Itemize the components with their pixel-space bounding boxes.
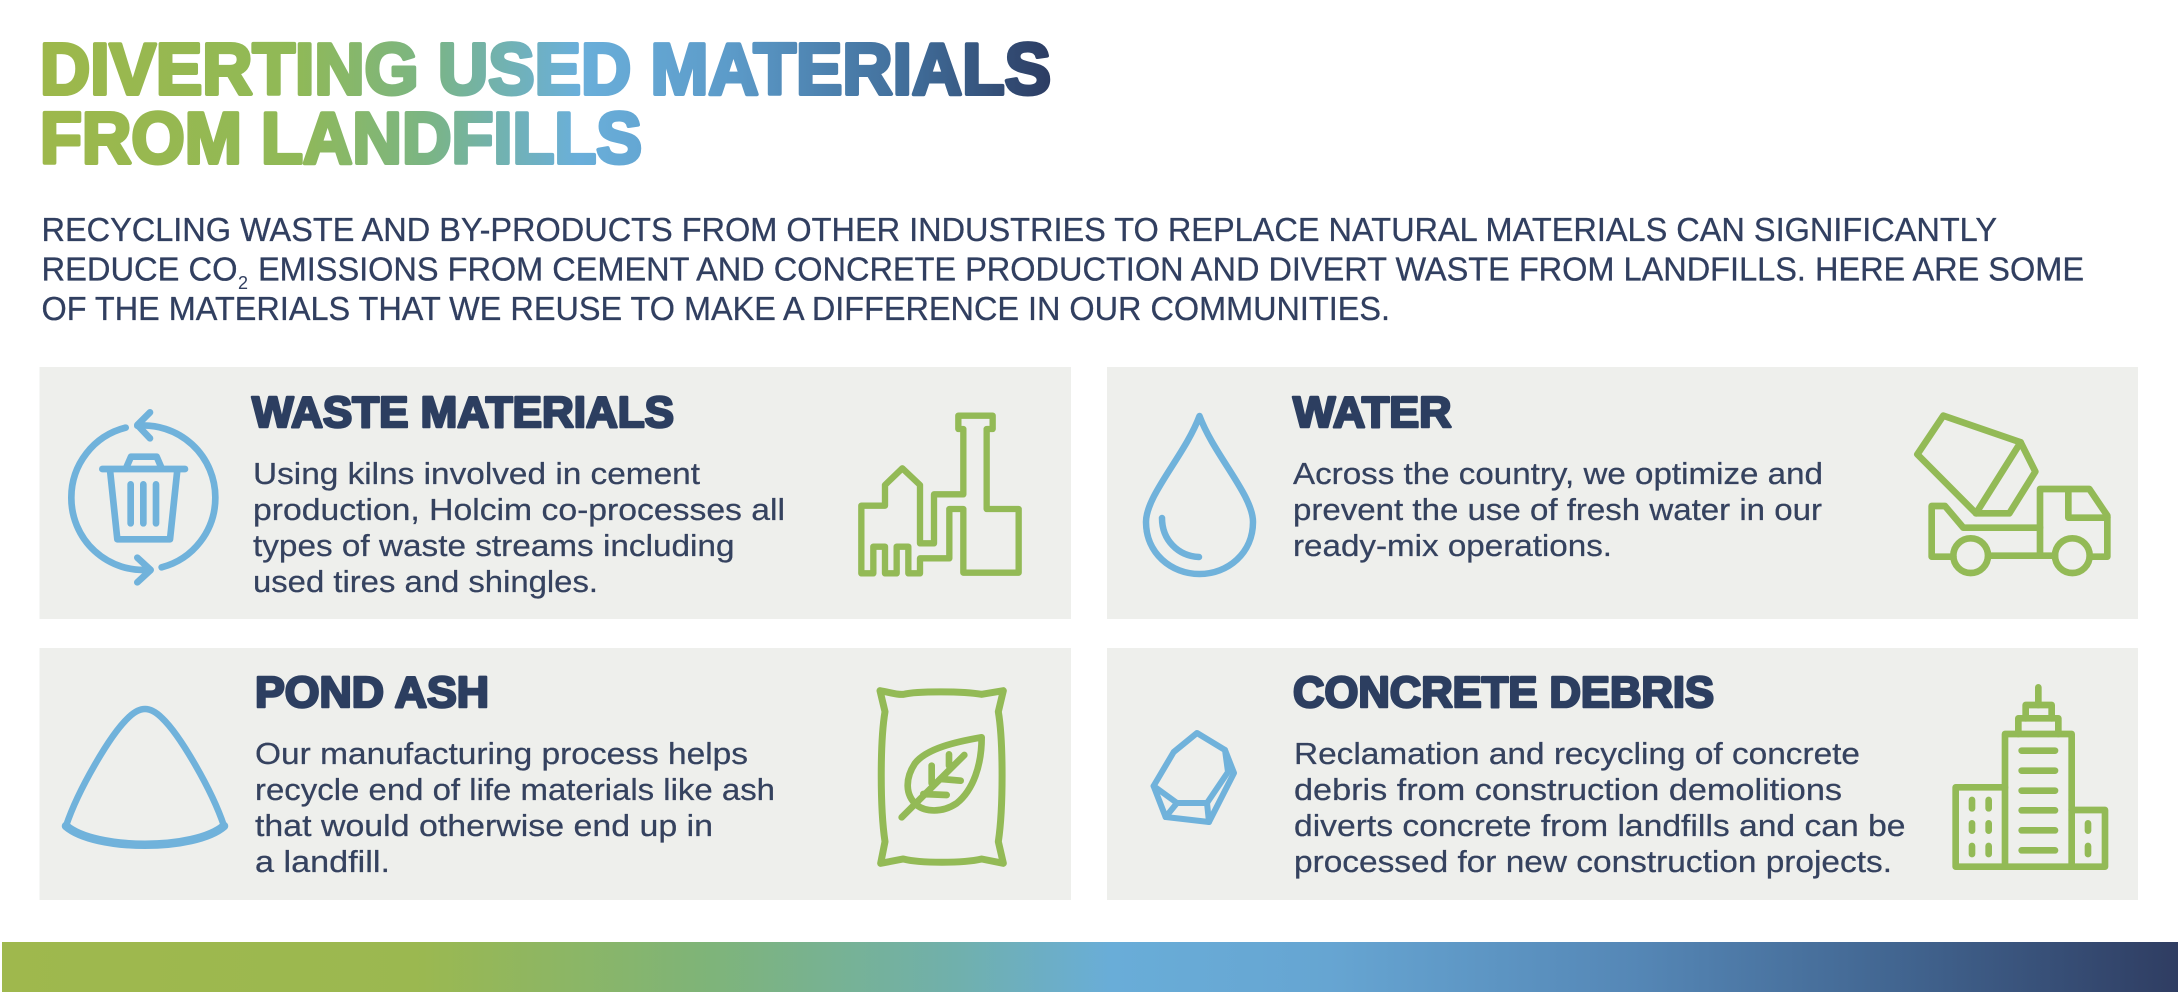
icon: ash pile [66, 709, 224, 845]
body text: water [1293, 457, 1823, 563]
body text: waste materials: types of waste streams including [253, 529, 734, 563]
body text: waste materials: Using kilns involved in cement [253, 457, 701, 491]
heading: pond ash: POND ASH [255, 668, 489, 717]
intro text [42, 211, 2084, 327]
body text: concrete debris: Reclamation and recycling of concrete [1294, 737, 1860, 771]
icon: bag with leaf [880, 691, 1003, 863]
heading: concrete debris: CONCRETE DEBRIS [1293, 668, 1714, 717]
icon: city buildings [1956, 687, 2105, 867]
body text: pond ash: Our manufacturing process helps [255, 737, 748, 771]
panel: concrete debris [1107, 648, 2138, 900]
body text: waste materials: used tires and shingles. [253, 565, 598, 599]
body text: pond ash: that would otherwise end up in [255, 809, 713, 843]
body text: water: Across the country, we optimize and [1293, 457, 1823, 491]
icon: water drop [1146, 416, 1253, 574]
icon: factory [861, 416, 1019, 573]
title: FROM LANDFILLS [40, 99, 642, 179]
body text: concrete debris [1294, 737, 1906, 879]
intro text: REDUCE CO [42, 250, 238, 288]
body text: pond ash: a landfill. [255, 845, 390, 879]
icon: concrete mixer truck [1917, 416, 2107, 573]
body text: pond ash [255, 737, 775, 879]
heading: waste materials: WASTE MATERIALS [252, 388, 674, 437]
body text: concrete debris: debris from construction demolitions [1294, 773, 1842, 807]
body text: waste materials: production, Holcim co-processes all [253, 493, 785, 527]
icon: recycling trash bin [71, 412, 215, 582]
intro text: RECYCLING WASTE AND BY-PRODUCTS FROM OTHER INDUSTRIES TO REPLACE NATURAL MATERIALS CAN SIGNIFICANTLY [42, 211, 1997, 248]
panel background [40, 367, 1071, 619]
body text: waste materials [253, 457, 785, 599]
title: DIVERTING USED MATERIALS [40, 30, 1051, 110]
panel background [1107, 648, 2138, 900]
body text: water: ready-mix operations. [1293, 529, 1612, 563]
icon: concrete chunk [1154, 733, 1234, 822]
intro text: OF THE MATERIALS THAT WE REUSE TO MAKE A DIFFERENCE IN OUR COMMUNITIES. [42, 290, 1390, 327]
body text: pond ash: recycle end of life materials like ash [255, 773, 775, 807]
body text: concrete debris: diverts concrete from landfills and can be [1294, 809, 1906, 843]
panel: water [1107, 367, 2138, 619]
panel background [40, 648, 1071, 900]
intro text: EMISSIONS FROM CEMENT AND CONCRETE PRODUCTION AND DIVERT WASTE FROM LANDFILLS. HERE ARE SOME [258, 250, 2084, 288]
gradient footer bar [2, 942, 2178, 992]
panel background [1107, 367, 2138, 619]
body text: concrete debris: processed for new construction projects. [1294, 845, 1892, 879]
intro text: 2 [238, 273, 248, 293]
heading: water: WATER [1293, 388, 1452, 437]
title [40, 30, 1051, 179]
panel: waste materials [40, 367, 1071, 619]
panel: pond ash [40, 648, 1071, 900]
body text: water: prevent the use of fresh water in our [1293, 493, 1822, 527]
